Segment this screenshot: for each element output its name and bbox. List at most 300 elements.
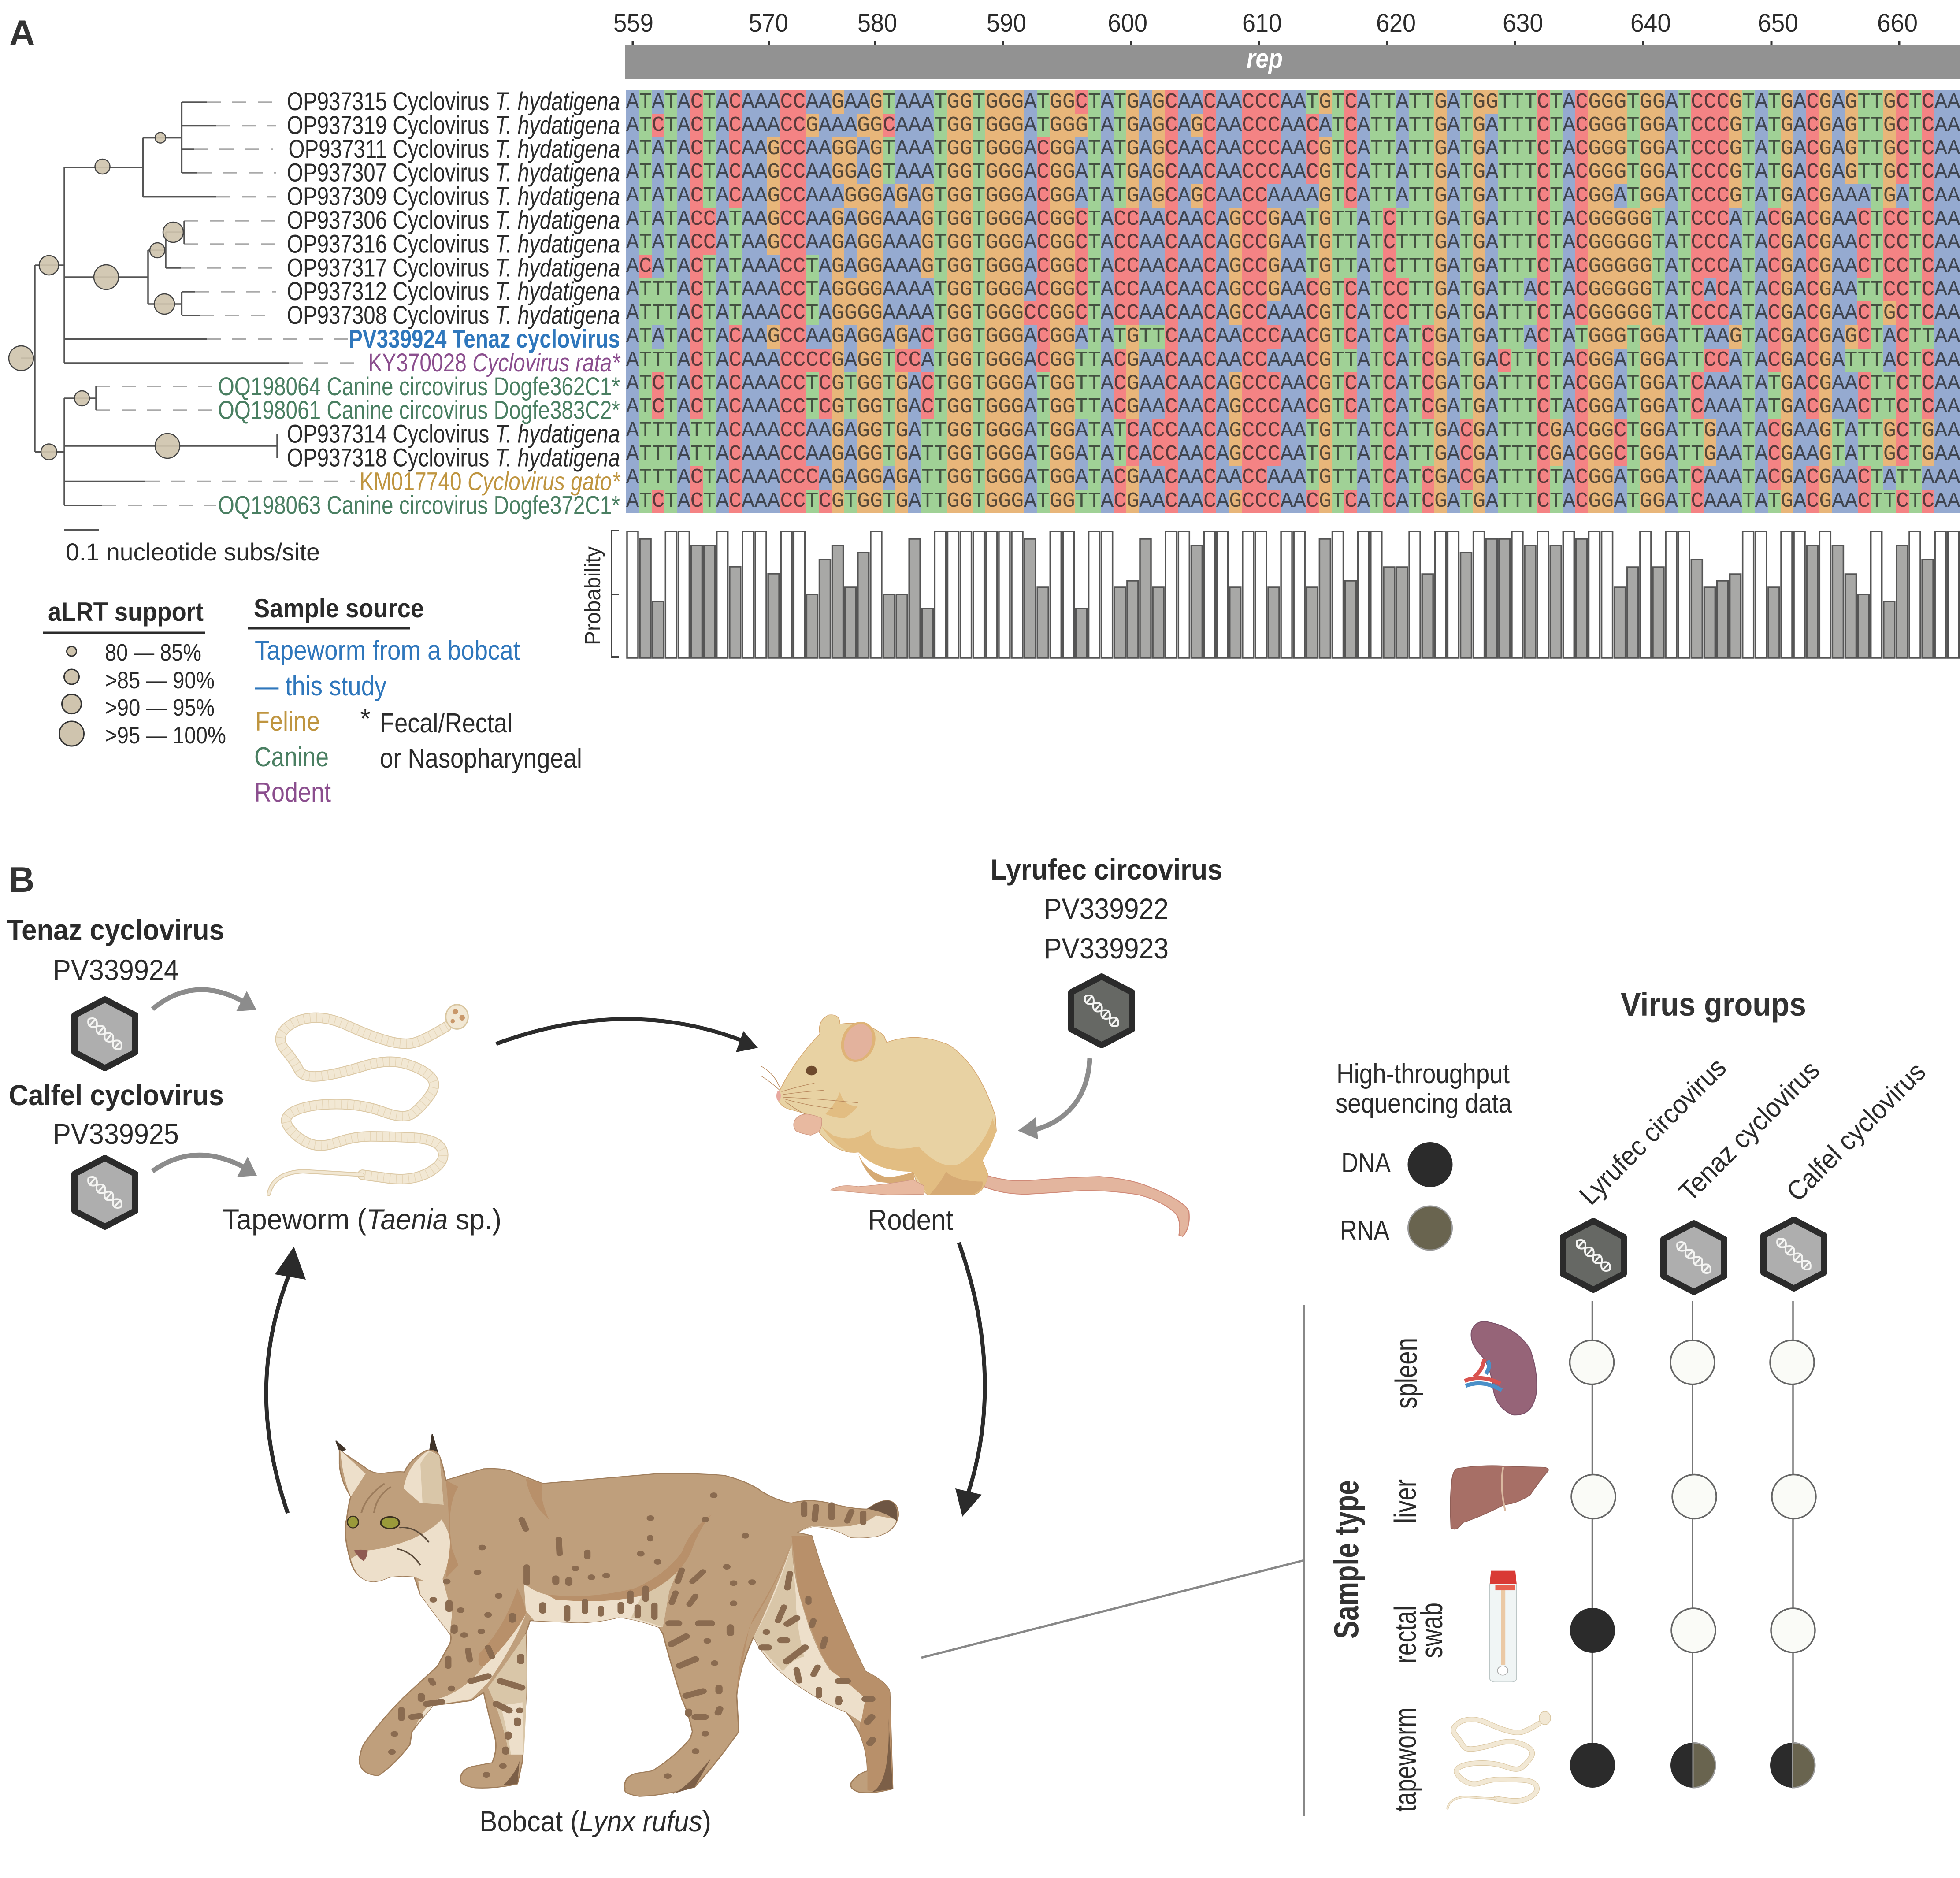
alignment row: KM017740: AA (1178, 465, 1203, 490)
alignment row: OP937317: GGGGG (1588, 254, 1652, 278)
alignment row: OP937317: T (973, 254, 985, 278)
alignment row: KM017740: C (1768, 465, 1781, 490)
alignment row: OP937307: T (1088, 160, 1101, 184)
alignment row: PV339924: T (1871, 324, 1883, 349)
alignment row: OP937316: C (1537, 230, 1550, 255)
alignment row: OP937309: G (1319, 184, 1332, 208)
alignment row: PV339924: G (1781, 324, 1793, 349)
icon: Calfel virus hexagon (74, 1158, 135, 1227)
alignment row: OP937314: A (1101, 419, 1114, 443)
alignment row: OP937318: C (1768, 442, 1781, 466)
alignment row: OP937319: A (1024, 113, 1036, 137)
alignment row: OP937314: A (1216, 419, 1229, 443)
position ruler with tick labels: 620 (1376, 9, 1416, 37)
alignment row: OP937308: T (1332, 301, 1344, 325)
alignment row: OQ198061: GG (947, 395, 973, 419)
alignment row: PV339924: A (1101, 324, 1114, 349)
alignment row: OQ198064: A (626, 371, 639, 396)
alignment row: OP937311: AA (1934, 137, 1960, 161)
alignment row: KY370028: G (1473, 348, 1485, 372)
alignment row: OP937319: A (1755, 113, 1768, 137)
position ruler with tick labels: 630 (1503, 9, 1543, 37)
alignment row: OP937314: A (677, 419, 690, 443)
alignment row: KY370028: C (1806, 348, 1819, 372)
alignment row: OP937314: AA (1178, 419, 1203, 443)
alignment row: OP937316: A (1793, 230, 1806, 255)
taxon labels: OP937307 Cyclovirus T. hydatigena (287, 159, 620, 187)
alignment row: OP937315: G (1845, 90, 1858, 114)
alignment row: OP937319: A (1178, 113, 1191, 137)
alignment row: PV339924: A (1665, 324, 1678, 349)
alignment row: OP937318: G (1781, 442, 1793, 466)
alignment row: OP937311: C (1922, 137, 1934, 161)
alignment row: KY370028: A (1665, 348, 1678, 372)
alignment row: OP937306: T (639, 207, 652, 231)
alignment row: OP937317: A (1485, 254, 1498, 278)
alignment row: OP937309: C (1165, 184, 1178, 208)
alignment row: OP937317: GG (1050, 254, 1075, 278)
alignment row: OP937316: AA (1832, 230, 1857, 255)
alignment row: OP937309: T (1114, 184, 1126, 208)
alignment row: OP937315: AAA (742, 90, 780, 114)
alignment row: KY370028: A (1793, 348, 1806, 372)
alignment row: OP937306: A (1101, 207, 1114, 231)
alignment row: OP937315: C (729, 90, 742, 114)
alignment row: OP937314: AA (806, 419, 832, 443)
alignment row: OQ198061: T (1332, 395, 1344, 419)
alignment row: OP937317: G (1434, 254, 1447, 278)
alignment row: OP937307: A (1024, 160, 1036, 184)
alignment row: OP937307: A (1793, 160, 1806, 184)
alignment row: OP937308: G (1319, 301, 1332, 325)
alignment row: PV339924: C (1383, 324, 1396, 349)
alignment row: OP937314: C (1460, 419, 1473, 443)
alignment row: OP937315: GG (947, 90, 973, 114)
alignment row: OP937309: AAAA (1267, 184, 1319, 208)
alignment row: PV339924: CCC (1242, 324, 1281, 349)
alignment row: OQ198061: AA (1934, 395, 1960, 419)
alignment row: OP937311: G (1473, 137, 1485, 161)
alignment row: OP937309: C (729, 184, 742, 208)
alignment row: OP937317: AA (1139, 254, 1165, 278)
alignment row: OQ198063: AA (1832, 489, 1858, 513)
alignment row: OQ198061: T (1909, 395, 1922, 419)
alignment row: OQ198063: T (1550, 489, 1563, 513)
tree scale bar: 0.1 nucleotide subs/site (66, 538, 320, 566)
alignment row: OP937306: T (973, 207, 985, 231)
alignment row: OP937307: A (677, 160, 690, 184)
alignment row: OP937306: G (767, 207, 780, 231)
alignment row: OP937315: G (1152, 90, 1165, 114)
alignment row: OP937306 (626, 208, 1960, 231)
alignment row: PV339924: T (973, 324, 985, 349)
alignment row: OQ198064: TT (1871, 371, 1896, 396)
alignment row: KY370028: GGG (985, 348, 1024, 372)
alignment row: OP937306: C (1857, 207, 1871, 231)
alignment row: KY370028: TT (1678, 348, 1704, 372)
alignment row: OQ198063: A (716, 489, 729, 513)
alignment row: OP937318: T (1088, 442, 1101, 466)
alignment row: OQ198064: G (1819, 371, 1832, 396)
alignment row: OP937319: CCC (1242, 113, 1281, 137)
alignment row: OP937309: G (1434, 184, 1447, 208)
alignment row: OQ198061: GG (1050, 395, 1075, 419)
alignment row: OP937314: TT (1678, 419, 1704, 443)
alignment row: OP937306: GGG (985, 207, 1024, 231)
alignment row: OP937307: C (1036, 160, 1050, 184)
alignment row: OP937312: CC (780, 278, 806, 302)
alignment row: OQ198064: A (1665, 371, 1678, 396)
alignment row: OP937319: AAA (895, 113, 934, 137)
alignment row: OQ198061: A (1447, 395, 1460, 419)
alignment row: KY370028: A (626, 348, 639, 372)
alignment row: OP937312: C (1344, 278, 1357, 302)
alignment row: OQ198064: C (1306, 371, 1319, 396)
alignment row: OP937317 (626, 255, 1960, 278)
alignment row: OP937317: AA (1832, 254, 1857, 278)
alignment row: OQ198061: C (1203, 395, 1216, 419)
alignment row: OP937318: AAA (742, 442, 780, 466)
alignment row: KY370028: G (1819, 348, 1832, 372)
alignment row: OP937306: A (677, 207, 690, 231)
alignment row: OP937309: AA (1216, 184, 1242, 208)
alignment row: OP937315 (626, 90, 1960, 114)
alignment row: OP937317: G (1267, 254, 1281, 278)
alignment row: OP937316: C (1857, 230, 1871, 255)
alignment row: OP937306: AA (1281, 207, 1306, 231)
icon: spleen (1465, 1321, 1537, 1415)
alignment row: OQ198061: C (819, 395, 832, 419)
alignment row: OQ198061: G (1781, 395, 1793, 419)
alignment row: OQ198061: A (1024, 395, 1036, 419)
position ruler with tick labels: 650 (1758, 9, 1798, 37)
alignment row: OP937319: A (1563, 113, 1575, 137)
alignment row: OP937318: AA (1934, 442, 1960, 466)
alignment row: OP937312: C (1306, 278, 1319, 302)
alignment row: KY370028: AA (1139, 348, 1165, 372)
alignment row: OP937307: T (664, 160, 677, 184)
alignment row: OP937308: C (1575, 301, 1588, 325)
alignment row: OQ198061: A (1357, 395, 1370, 419)
alignment row: OQ198061: A (1614, 395, 1627, 419)
alignment row: OP937311: G (1845, 137, 1858, 161)
alignment row: OP937307: A (1075, 160, 1088, 184)
alignment row: OP937308: G (1229, 301, 1242, 325)
alignment row: OP937316: A (844, 230, 857, 255)
alignment row: OP937309: G (1781, 184, 1793, 208)
alignment row: OQ198064: T (1550, 371, 1563, 396)
alignment row: OQ198064: C (819, 371, 832, 396)
alignment row: OQ198064: C (1165, 371, 1178, 396)
alignment row: OP937316: C (1922, 230, 1934, 255)
alignment row: OP937306: T (1678, 207, 1691, 231)
alignment row: PV339924: C (1896, 324, 1909, 349)
alignment row: OP937312: TT (1409, 278, 1434, 302)
alignment row: OP937319: A (1319, 113, 1332, 137)
alignment row: OP937306: AA (1934, 207, 1960, 231)
alignment row: OP937314: GG (1640, 419, 1665, 443)
alignment row: OP937306: G (1473, 207, 1485, 231)
alignment row: OP937319: GG (947, 113, 973, 137)
alignment row: OP937314: T (1627, 419, 1640, 443)
alignment row: OP937311: A (1396, 137, 1409, 161)
alignment row: KM017740: TTT (1498, 465, 1537, 490)
alignment row: OP937306: T (1871, 207, 1883, 231)
alignment row: KM017740: CCC (780, 465, 819, 490)
alignment row: OP937306: AA (806, 207, 832, 231)
alignment row: OP937312: TT (1857, 278, 1883, 302)
alignment row: OP937316: C (1203, 230, 1216, 255)
alignment row: OQ198063: C (652, 489, 664, 513)
alignment row: OP937307: G (870, 160, 883, 184)
alignment row: OQ198061: T (1370, 395, 1383, 419)
alignment row: OP937315: CC (780, 90, 806, 114)
alignment row: OP937312: CC (1242, 278, 1267, 302)
alignment row: OP937312: A (1357, 278, 1370, 302)
alignment row: OP937307: T (639, 160, 652, 184)
alignment row: OP937311: G (870, 137, 883, 161)
alignment row: OQ198061: G (1473, 395, 1485, 419)
alignment row: OP937317: G (1781, 254, 1793, 278)
alignment row: OP937312: T (729, 278, 742, 302)
alignment row: OP937309: G (767, 184, 780, 208)
alignment row: OP937316: CC (690, 230, 716, 255)
alignment row: OQ198061: C (1858, 395, 1871, 419)
alignment row: OP937312: AAA (742, 278, 780, 302)
alignment row: OP937307: T (1742, 160, 1755, 184)
alignment row: OP937316: A (1024, 230, 1036, 255)
alignment row: OP937319: T (1768, 113, 1781, 137)
position ruler with tick labels: 590 (987, 9, 1026, 37)
alignment row: OP937319: T (1114, 113, 1126, 137)
alignment row: OP937318: TTT (639, 442, 677, 466)
alignment row: OP937309: G (1152, 184, 1165, 208)
alignment row: PV339924: G (1126, 324, 1139, 349)
alignment row: OP937316: T (1370, 230, 1383, 255)
alignment row: OP937307: CCC (1242, 160, 1281, 184)
alignment row: OP937312: A (1447, 278, 1460, 302)
alignment row: OP937315: CCC (1691, 90, 1729, 114)
alignment row: OP937309: CCC (1691, 184, 1729, 208)
alignment row: OP937314: A (1357, 419, 1370, 443)
alignment row: OP937309: A (1447, 184, 1460, 208)
alignment row: OP937318: A (716, 442, 729, 466)
alignment row: OP937306: T (1652, 207, 1665, 231)
alignment row: OP937311: A (1357, 137, 1370, 161)
alignment row: OP937307: T (973, 160, 985, 184)
alignment row: KM017740: T (1550, 465, 1563, 490)
alignment row: OP937316: GG (947, 230, 973, 255)
alignment row: OP937316: C (1075, 230, 1088, 255)
alignment row: OP937311: TT (1409, 137, 1434, 161)
alignment row: OP937311: TT (1370, 137, 1396, 161)
alignment row: OP937309: A (1665, 184, 1678, 208)
alignment row: OP937306: C (1383, 207, 1396, 231)
alignment row: KM017740: AAA (1922, 465, 1960, 490)
alignment row: OP937314: A (1665, 419, 1678, 443)
alignment row: PV339924: G (1473, 324, 1485, 349)
alignment row: OP937315: G (870, 90, 883, 114)
alignment row: OP937319: T (1627, 113, 1640, 137)
alignment row: OP937312: A (1563, 278, 1575, 302)
alignment row: OP937307: C (1922, 160, 1934, 184)
alignment row: OQ198063: GG (1588, 489, 1614, 513)
alignment row: OP937315: G (1729, 90, 1742, 114)
alignment row: OQ198061: C (1691, 395, 1704, 419)
alignment row: KM017740: G (1473, 465, 1485, 490)
alignment row: OP937309: G (1473, 184, 1485, 208)
alignment row: OQ198063: C (1165, 489, 1178, 513)
alignment row: OQ198061: AA (1139, 395, 1165, 419)
alignment row: OP937307: AA (806, 160, 832, 184)
alignment row: KY370028: C (1422, 348, 1434, 372)
alignment row: OQ198061: CC (780, 395, 806, 419)
alignment row: KY370028: GG (1640, 348, 1665, 372)
alignment row: OQ198064: T (1768, 371, 1781, 396)
alignment row: OP937317: A (626, 254, 639, 278)
alignment row: OQ198061: TT (1871, 395, 1896, 419)
alignment row: OQ198061: T (883, 395, 895, 419)
alignment row: KM017740: GG (1640, 465, 1665, 490)
alignment row: OQ198063: TT (1871, 489, 1896, 513)
alignment row: PV339924: C (921, 324, 934, 349)
alignment row: OP937312: A (1704, 278, 1716, 302)
alignment row: OQ198061: C (1344, 395, 1357, 419)
alignment row: KY370028: T (1627, 348, 1640, 372)
alignment row: OQ198063: CCC (1242, 489, 1281, 513)
alignment row: OQ198064: TTT (1498, 371, 1537, 396)
alignment row: OP937307: G (1845, 160, 1858, 184)
alignment row: OP937317: T (1678, 254, 1691, 278)
alignment row: PV339924: A (1832, 324, 1845, 349)
legend: sample source: — this study (255, 671, 386, 701)
position ruler with tick labels: 559 (613, 9, 653, 37)
alignment row: OP937318: G (895, 442, 908, 466)
alignment row: KM017740: TT (921, 465, 947, 490)
alignment row: OP937318: C (1126, 442, 1139, 466)
alignment row: OP937306: T (1550, 207, 1563, 231)
alignment row: OP937309: T (1460, 184, 1473, 208)
alignment row: KM017740: A (1447, 465, 1460, 490)
alignment row: PV339924: A (1485, 324, 1498, 349)
alignment row: OP937319: G (1729, 113, 1742, 137)
alignment row: OP937317: T (1909, 254, 1922, 278)
alignment row: OP937316: T (1871, 230, 1883, 255)
legend: sequencing data: sequencing data (1336, 1088, 1512, 1119)
alignment row: OP937311: T (664, 137, 677, 161)
alignment row: OP937307: GG (1050, 160, 1075, 184)
alignment row: OQ198063: G (895, 489, 908, 513)
alignment row: PV339924: CC (780, 324, 806, 349)
alignment row: OQ198061: GGG (985, 395, 1024, 419)
alignment row: OQ198064: T (664, 371, 677, 396)
alignment row: OQ198064: A (1614, 371, 1627, 396)
alignment row: PV339924: AA (1178, 324, 1203, 349)
alignment row: OP937311: G (1126, 137, 1139, 161)
alignment row: PV339924: T (1627, 324, 1640, 349)
alignment row: OQ198061: A (1665, 395, 1678, 419)
alignment row: OP937312: T (1460, 278, 1473, 302)
alignment row: OP937315: TTT (1498, 90, 1537, 114)
taxon labels: OP937311 Cyclovirus T. hydatigena (288, 135, 620, 163)
alignment row: OP937315: G (1819, 90, 1832, 114)
alignment row: OQ198061: GG (857, 395, 883, 419)
alignment row: OP937311: A (1665, 137, 1678, 161)
alignment row: OP937308: C (690, 301, 703, 325)
alignment row: OP937316: AA (806, 230, 832, 255)
label: Tenaz cyclovirus: Tenaz cyclovirus (7, 913, 224, 946)
alignment row: OP937318: GG (1640, 442, 1665, 466)
alignment row: OP937314: A (1485, 419, 1498, 443)
alignment row: KM017740: T (1370, 465, 1383, 490)
alignment row: KM017740: AA (1832, 465, 1858, 490)
alignment row: OP937319: C (652, 113, 664, 137)
alignment row: OP937308: A (1729, 301, 1742, 325)
alignment row: OP937307: T (1114, 160, 1126, 184)
position ruler with tick labels: 640 (1630, 9, 1671, 37)
alignment row: OP937314: CC (780, 419, 806, 443)
alignment row: OP937318: GGG (985, 442, 1024, 466)
alignment row: OP937314: G (1883, 419, 1896, 443)
alignment row: OP937306: G (1434, 207, 1447, 231)
alignment row: OP937312: A (1485, 278, 1498, 302)
alignment row: OP937316: C (1806, 230, 1819, 255)
alignment row: OP937311: C (729, 137, 742, 161)
alignment row: PV339924: GGG (1588, 324, 1627, 349)
alignment row: OP937309: TT (1370, 184, 1396, 208)
alignment row: OP937318: T (1370, 442, 1383, 466)
alignment row: OP937316: GGGGG (1588, 230, 1652, 255)
alignment row: OQ198061: T (1768, 395, 1781, 419)
alignment row: OQ198064: G (895, 371, 908, 396)
alignment row: OQ198064: C (1344, 371, 1357, 396)
alignment row: OP937316: A (1755, 230, 1768, 255)
alignment row: OP937309: AA (1934, 184, 1960, 208)
icon: liver (1451, 1466, 1548, 1529)
alignment row: OP937315: TT (1858, 90, 1883, 114)
alignment row: OQ198063: C (690, 489, 703, 513)
alignment row: OP937307: C (690, 160, 703, 184)
alignment row: OP937316: G (1473, 230, 1485, 255)
alignment row: OP937306: G (1819, 207, 1832, 231)
alignment row: OP937312: C (690, 278, 703, 302)
alignment row: OP937312: T (1742, 278, 1755, 302)
alignment row: KY370028: T (973, 348, 985, 372)
alignment row: OP937315: GG (1473, 90, 1498, 114)
alignment row: OP937312: G (1434, 278, 1447, 302)
alignment row: OP937318: T (973, 442, 985, 466)
alignment row: OP937306: TTT (1396, 207, 1434, 231)
alignment row: OQ198064: G (832, 371, 844, 396)
legend: aLRT support: >85 — 90% (105, 667, 215, 694)
alignment row: OP937311: GG (1640, 137, 1665, 161)
alignment row: OQ198064: T (1332, 371, 1344, 396)
alignment row: OP937318: TT (1858, 442, 1883, 466)
alignment row: OP937315: GGG (1588, 90, 1627, 114)
alignment row: OQ198064: A (1485, 371, 1498, 396)
alignment row: OP937315: G (1781, 90, 1793, 114)
alignment row: OP937311: T (1550, 137, 1563, 161)
alignment row: OP937306: C (1768, 207, 1781, 231)
alignment row: OP937314: AA (1281, 419, 1306, 443)
alignment row: OP937317: A (1793, 254, 1806, 278)
alignment row: OP937312: A (1793, 278, 1806, 302)
alignment row: PV339924: C (1806, 324, 1819, 349)
alignment row: OP937307: A (626, 160, 639, 184)
alignment row: OP937312: C (1691, 278, 1704, 302)
alignment row: OP937311: TTT (1498, 137, 1537, 161)
alignment row: OQ198061: T (1460, 395, 1473, 419)
